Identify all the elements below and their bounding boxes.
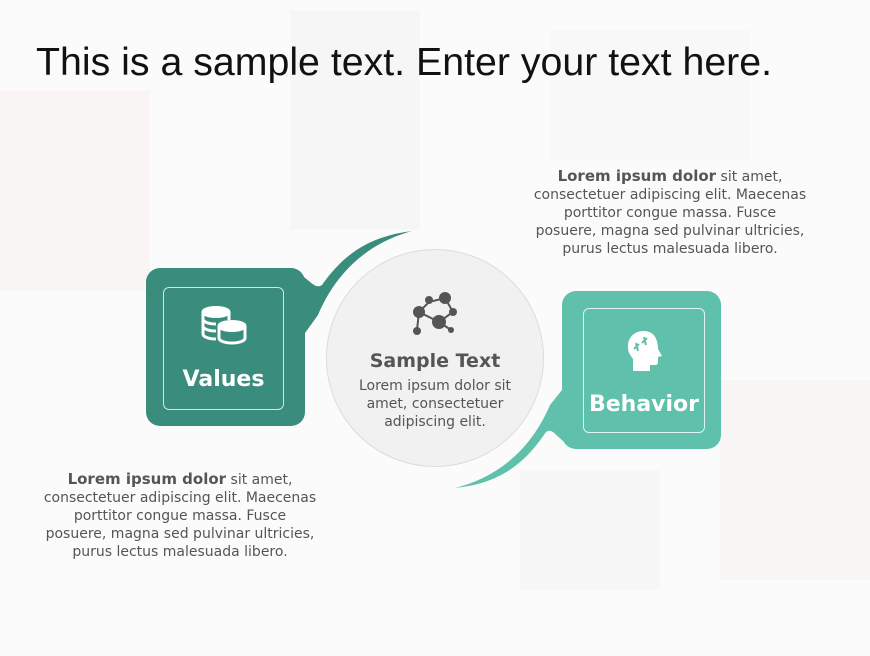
center circle <box>326 249 544 467</box>
label: Values: Values <box>183 367 264 392</box>
text block: bottom left <box>44 470 316 560</box>
text block: top right: porttitor congue massa. Fusce <box>564 205 776 221</box>
inner frame <box>583 308 705 433</box>
panel: behavior <box>562 291 721 449</box>
text block: bottom left: posuere, magna sed pulvinar ultricies, <box>46 526 314 542</box>
text: center body <box>359 378 511 430</box>
text block: bottom left: consectetuer adipiscing elit. Maecenas <box>44 490 316 506</box>
text block: top right: purus lectus malesuada libero. <box>562 241 778 257</box>
text block: top right: posuere, magna sed pulvinar ultricies, <box>536 223 804 239</box>
text block: bottom left: Lorem ipsum dolor sit amet, <box>68 470 292 488</box>
icon: head <box>628 331 662 371</box>
text block: bottom left: porttitor congue massa. Fusce <box>74 508 286 524</box>
panel: values <box>146 268 305 426</box>
text: center body: amet, consectetuer <box>367 396 503 412</box>
text: center body: Lorem ipsum dolor sit <box>359 378 511 394</box>
title: This is a sample text. Enter your text here. <box>36 40 772 84</box>
inner frame <box>163 287 284 410</box>
text block: top right: consectetuer adipiscing elit. Maecenas <box>534 187 806 203</box>
text block: top right: Lorem ipsum dolor sit amet, <box>558 167 782 185</box>
icon: coins <box>202 306 246 344</box>
text: center body: adipiscing elit. <box>384 414 486 430</box>
text block: top right <box>534 167 806 257</box>
heading: Sample Text: Sample Text <box>370 350 500 372</box>
text block: bottom left: purus lectus malesuada libero. <box>72 544 288 560</box>
label: Behavior: Behavior <box>589 392 699 417</box>
icon: network <box>413 292 457 335</box>
